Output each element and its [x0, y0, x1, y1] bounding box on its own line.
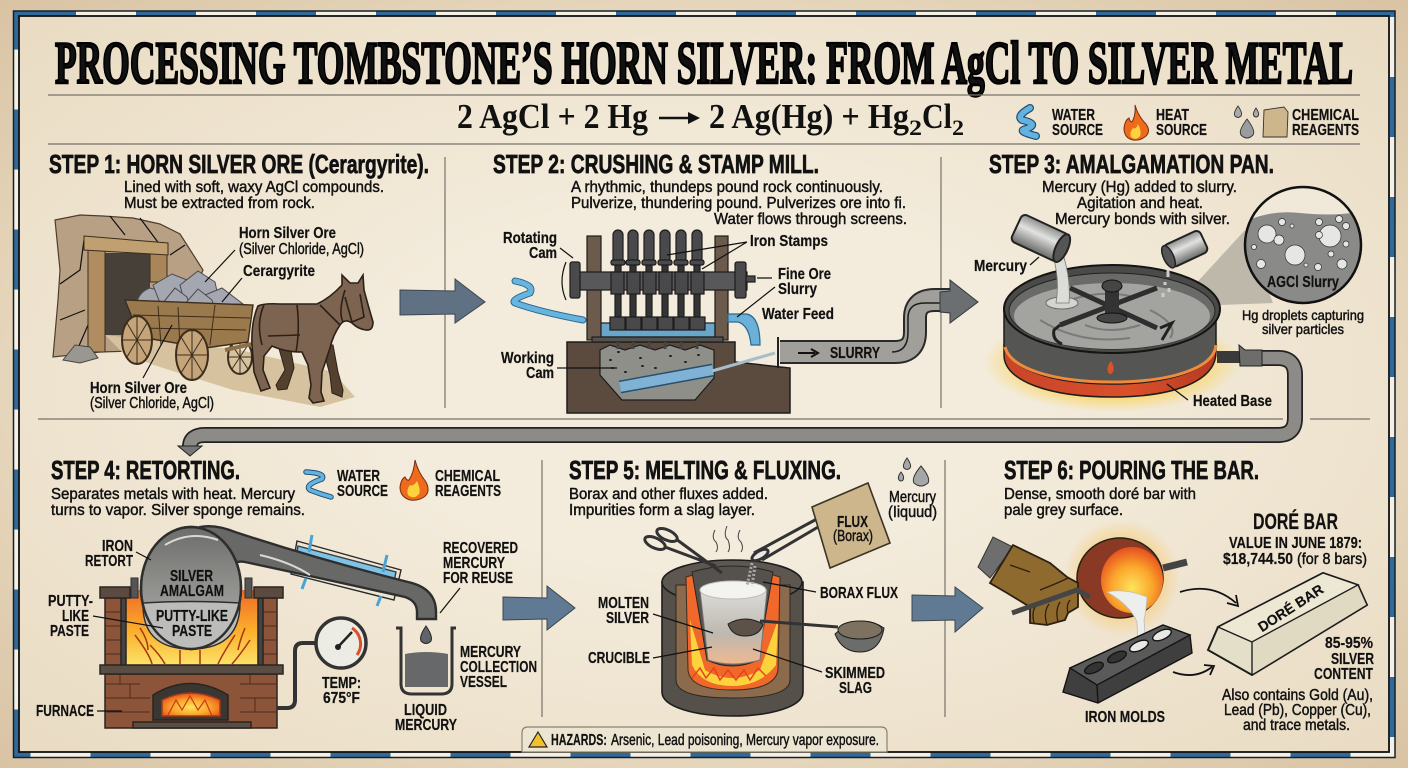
label: iron retort: IRON: [102, 538, 133, 555]
label: liquid mercury: LIQUID: [404, 702, 447, 719]
illustration: ore in cart: [136, 271, 243, 308]
text: step 3 description: Agitation and heat.: [1077, 195, 1203, 212]
illustration: slurry inset: [1245, 187, 1361, 303]
illustration: gloved hand: [978, 537, 1090, 625]
icon: heat source: [1124, 105, 1148, 140]
label: furnace: FURNACE: [36, 703, 94, 720]
legend label: water source: WATER: [1052, 107, 1095, 124]
illustration: flux bag: FLUX: [837, 514, 868, 531]
arrow: slurry pipe: SLURRY: [830, 345, 880, 362]
illustration: condenser: [291, 535, 401, 606]
chemical equation: 2 Ag(Hg) + Hg: [709, 97, 909, 136]
label: skimmed slag: SKIMMED: [825, 665, 885, 682]
legend: step 4 icons: [306, 460, 501, 500]
arrow: curved rotation arrow: [562, 262, 566, 300]
illustration: furnace: [100, 587, 283, 728]
label: putty-like paste: PASTE: [50, 623, 89, 640]
label: silver content: SILVER: [1331, 651, 1374, 668]
label: doré bar heading: DORÉ BAR: [1253, 509, 1338, 534]
text: step 6 description: Dense, smooth doré bar with: [1004, 486, 1196, 503]
panel: step 6: [978, 455, 1374, 734]
arrow: step 5 to step 6: [912, 587, 983, 632]
illustration: mule: [252, 275, 373, 403]
text: value in June 1879: $18,744.50: [1223, 551, 1293, 568]
text: step 3 description: Mercury (Hg) added to slurry.: [1042, 179, 1237, 196]
heading: step 5: STEP 5: MELTING & FLUXING.: [569, 455, 841, 485]
chemical equation: Cl: [922, 97, 952, 136]
text: hazards: HAZARDS:: [551, 732, 607, 749]
label: mercury collection vessel: VESSEL: [460, 674, 507, 691]
heading: step 2: STEP 2: CRUSHING & STAMP MILL.: [493, 149, 819, 179]
label: mercury collection vessel: COLLECTION: [460, 659, 537, 676]
text: also contains: and trace metals.: [1243, 717, 1350, 734]
text: step 2 description: A rhythmic, thundeps pound rock continuously.: [571, 179, 883, 196]
panel: step 3: [974, 149, 1364, 412]
text: step 4 description: Separates metals with heat. Mercury: [51, 486, 295, 503]
label: putty-like paste: PUTTY-: [48, 593, 93, 610]
icon: droplets and reagent bag: [1234, 106, 1288, 138]
illustration: water inlet: [514, 281, 583, 320]
illustration: flux bag: [812, 483, 890, 568]
label: skimmed slag: SLAG: [839, 680, 872, 697]
label: fine ore slurry: Fine Ore: [778, 266, 831, 283]
label: recovered mercury: RECOVERED: [443, 540, 518, 557]
label: rotating cam: Rotating: [503, 230, 557, 247]
label: chemical reagents: CHEMICAL: [435, 468, 500, 485]
label: silver amalgam: AMALGAM: [160, 583, 224, 600]
label: working cam: Working: [501, 350, 554, 367]
text: step 2 description: Pulverize, thundering pound. Pulverizes ore into fi.: [571, 195, 906, 212]
label: heated base: Heated Base: [1193, 393, 1272, 410]
illustration: zoom wedge: [1190, 230, 1273, 305]
illustration: skimming ladle: [728, 619, 884, 652]
label: mercury liquid: (Iiquud): [888, 504, 937, 521]
label: horn silver ore (upper): Horn Silver Ore: [239, 225, 336, 242]
label: rotating cam: Cam: [529, 245, 557, 262]
label: agcl slurry: AGCl Slurry: [1267, 274, 1339, 291]
illustration: mercury beakers: [1010, 213, 1209, 309]
text: step 3 description: Mercury bonds with silver.: [1055, 211, 1230, 228]
text: step 5 description: Borax and other fluxes added.: [569, 486, 768, 503]
label: putty-like paste in retort: PUTTY-LIKE: [156, 608, 228, 625]
label: water source: SOURCE: [337, 483, 388, 500]
illustration: amalgamation pan: [984, 265, 1240, 412]
icon: water source: [1020, 108, 1036, 136]
arrow: step 4 to step 5: [503, 586, 575, 630]
label: mercury: Mercury: [974, 258, 1027, 275]
illustration: temperature gauge: [277, 618, 366, 708]
illustration: tongs: [643, 514, 830, 573]
arrow: slurry pipe: [777, 280, 978, 368]
illustration: retort: [131, 526, 436, 649]
label: iron molds: IRON MOLDS: [1085, 709, 1165, 726]
legend: top icons: [1020, 105, 1359, 140]
illustration: pouring crucible: [1064, 520, 1187, 648]
label: horn silver ore (lower): (Silver Chloride, AgCl): [90, 395, 214, 412]
label: liquid mercury: MERCURY: [395, 717, 457, 734]
panel: step 1: [49, 149, 429, 412]
panel: step 5: [569, 455, 937, 716]
text: step 1 description: Must be extracted from rock.: [124, 195, 315, 212]
label: molten silver: SILVER: [606, 610, 649, 627]
icon: warning triangle: [529, 732, 547, 747]
label: iron retort: RETORT: [85, 553, 133, 570]
label: temperature: 675°F: [323, 690, 360, 707]
text: hazards: Arsenic, Lead poisoning, Mercury vapor exposure.: [611, 732, 879, 749]
legend label: water source: SOURCE: [1052, 122, 1103, 139]
label: borax flux: BORAX FLUX: [820, 585, 898, 602]
icon: water: [306, 472, 331, 497]
panel: step 2: [493, 149, 978, 413]
label: crucible: CRUCIBLE: [588, 650, 650, 667]
callout: hazards: [522, 727, 887, 752]
text: step 4 description: turns to vapor. Silver sponge remains.: [51, 502, 305, 519]
text: droplets caption: Hg droplets capturing: [1242, 307, 1364, 323]
illustration: doré bar: [1208, 573, 1367, 675]
illustration: mercury collection vessel: [396, 626, 456, 694]
heading: step 3: STEP 3: AMALGAMATION PAN.: [989, 149, 1274, 179]
label: molten silver: MOLTEN: [598, 595, 649, 612]
label: mercury liquid: Mercury: [889, 489, 936, 506]
label: fine ore slurry: Slurry: [778, 281, 817, 298]
label: mercury collection vessel: MERCURY: [460, 644, 521, 661]
label: putty-like paste in retort: PASTE: [172, 623, 212, 640]
arrow: step 1 to step 2: [400, 279, 485, 323]
label: recovered mercury: MERCURY: [443, 555, 505, 572]
chemical equation: 2: [952, 115, 964, 140]
label: horn silver ore (lower): Horn Silver Ore: [90, 380, 187, 397]
arrow: return pipe from step 3 to step 4: [178, 345, 1295, 456]
text: value in June 1879: (for 8 bars): [1297, 551, 1367, 568]
label: working cam: Cam: [526, 365, 554, 382]
text: droplets caption: silver particles: [1262, 321, 1344, 337]
label: water source: WATER: [337, 468, 380, 485]
legend label: heat source: HEAT: [1156, 107, 1189, 124]
text: value in June 1879: VALUE IN JUNE 1879:: [1229, 535, 1362, 552]
label: putty-like paste: LIKE: [62, 608, 89, 625]
label: temperature: TEMP:: [322, 675, 361, 692]
label: water feed: Water Feed: [762, 306, 834, 323]
illustration: flux bag: (Borax): [833, 528, 873, 545]
illustration: mine entrance: [53, 215, 355, 407]
legend label: chemical reagents: REAGENTS: [1292, 122, 1359, 139]
text: step 2 description: Water flows through screens.: [714, 211, 907, 228]
label: chemical reagents: REAGENTS: [435, 483, 501, 500]
illustration: iron mold: [1063, 625, 1192, 703]
illustration: wagon: [122, 300, 310, 380]
label: horn silver ore (upper): (Silver Chloride, AgCl): [239, 241, 364, 258]
label: silver content: CONTENT: [1314, 666, 1373, 683]
label: recovered mercury: FOR REUSE: [443, 570, 513, 587]
arrow: mold to bar upper: [1180, 589, 1238, 606]
text: also contains: Also contains Gold (Au),: [1222, 687, 1373, 704]
icon: mercury droplets: [898, 458, 929, 486]
label: iron stamps: Iron Stamps: [750, 233, 828, 250]
chemical equation: [457, 97, 964, 140]
chemical equation: 2 AgCl + 2 Hg: [457, 97, 648, 136]
legend label: chemical reagents: CHEMICAL: [1292, 107, 1359, 124]
label: silver content: 85-95%: [1325, 635, 1373, 652]
label: cerargyrite: Cerargyrite: [243, 263, 315, 280]
text: step 6 description: pale grey surface.: [1004, 502, 1123, 519]
label: silver amalgam: SILVER: [170, 568, 213, 585]
chemical equation: 2: [909, 115, 922, 140]
legend label: heat source: SOURCE: [1156, 122, 1207, 139]
panel: step 4: [36, 455, 537, 734]
arrow: mold to bar lower: [1173, 665, 1214, 675]
heading: step 1: STEP 1: HORN SILVER ORE (Cerargyrite).: [49, 149, 429, 179]
text: also contains: Lead (Pb), Copper (Cu),: [1224, 702, 1371, 719]
text: step 1 description: Lined with soft, waxy AgCl compounds.: [124, 179, 384, 196]
heading: step 4: STEP 4: RETORTING.: [51, 455, 240, 485]
illustration: stamp mill: [567, 230, 790, 413]
illustration: doré bar: DORÉ BAR: [1255, 581, 1326, 635]
icon: flame: [400, 460, 428, 500]
text: step 5 description: Impurities form a slag layer.: [569, 502, 755, 519]
heading: step 6: STEP 6: POURING THE BAR.: [1004, 455, 1259, 485]
illustration: crucible furnace: [662, 526, 803, 716]
